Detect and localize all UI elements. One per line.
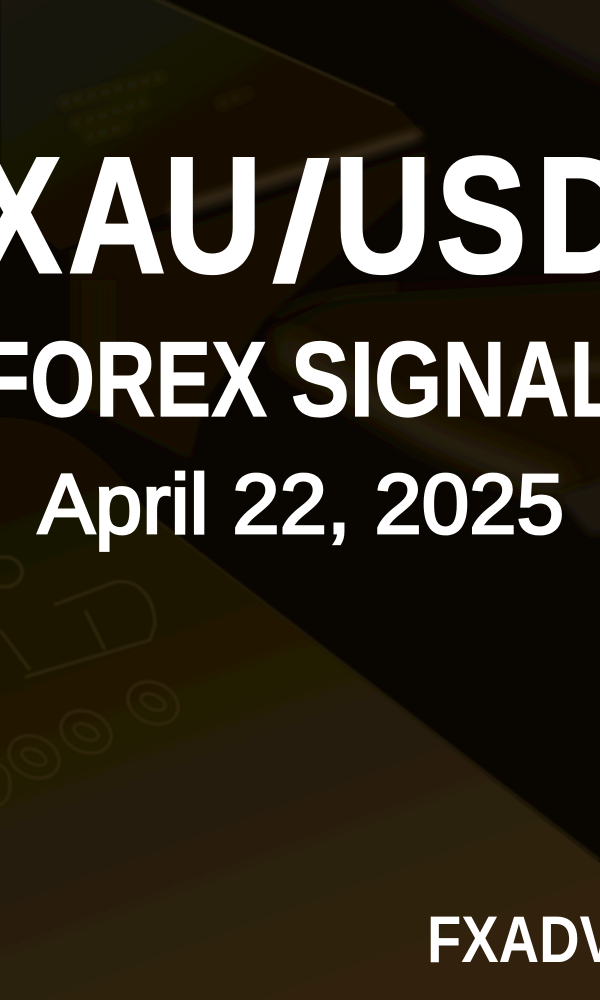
middle bar: [270, 280, 600, 500]
top-right bar: [430, 0, 600, 85]
subtitle: FOREX SIGNAL: [0, 319, 600, 439]
upper bar side: [70, 150, 432, 460]
upper bar highlighted edge: [170, 134, 420, 212]
date: April 22, 2025: [38, 457, 564, 551]
title: XAU/USD: [0, 122, 600, 315]
lower bar: [0, 418, 600, 1000]
title: XAU/USD: /: [270, 130, 332, 315]
embossed mark, upper bar: [60, 76, 250, 138]
upper bar top face: [0, 0, 425, 250]
embossed mark, lower bar: [0, 557, 185, 805]
